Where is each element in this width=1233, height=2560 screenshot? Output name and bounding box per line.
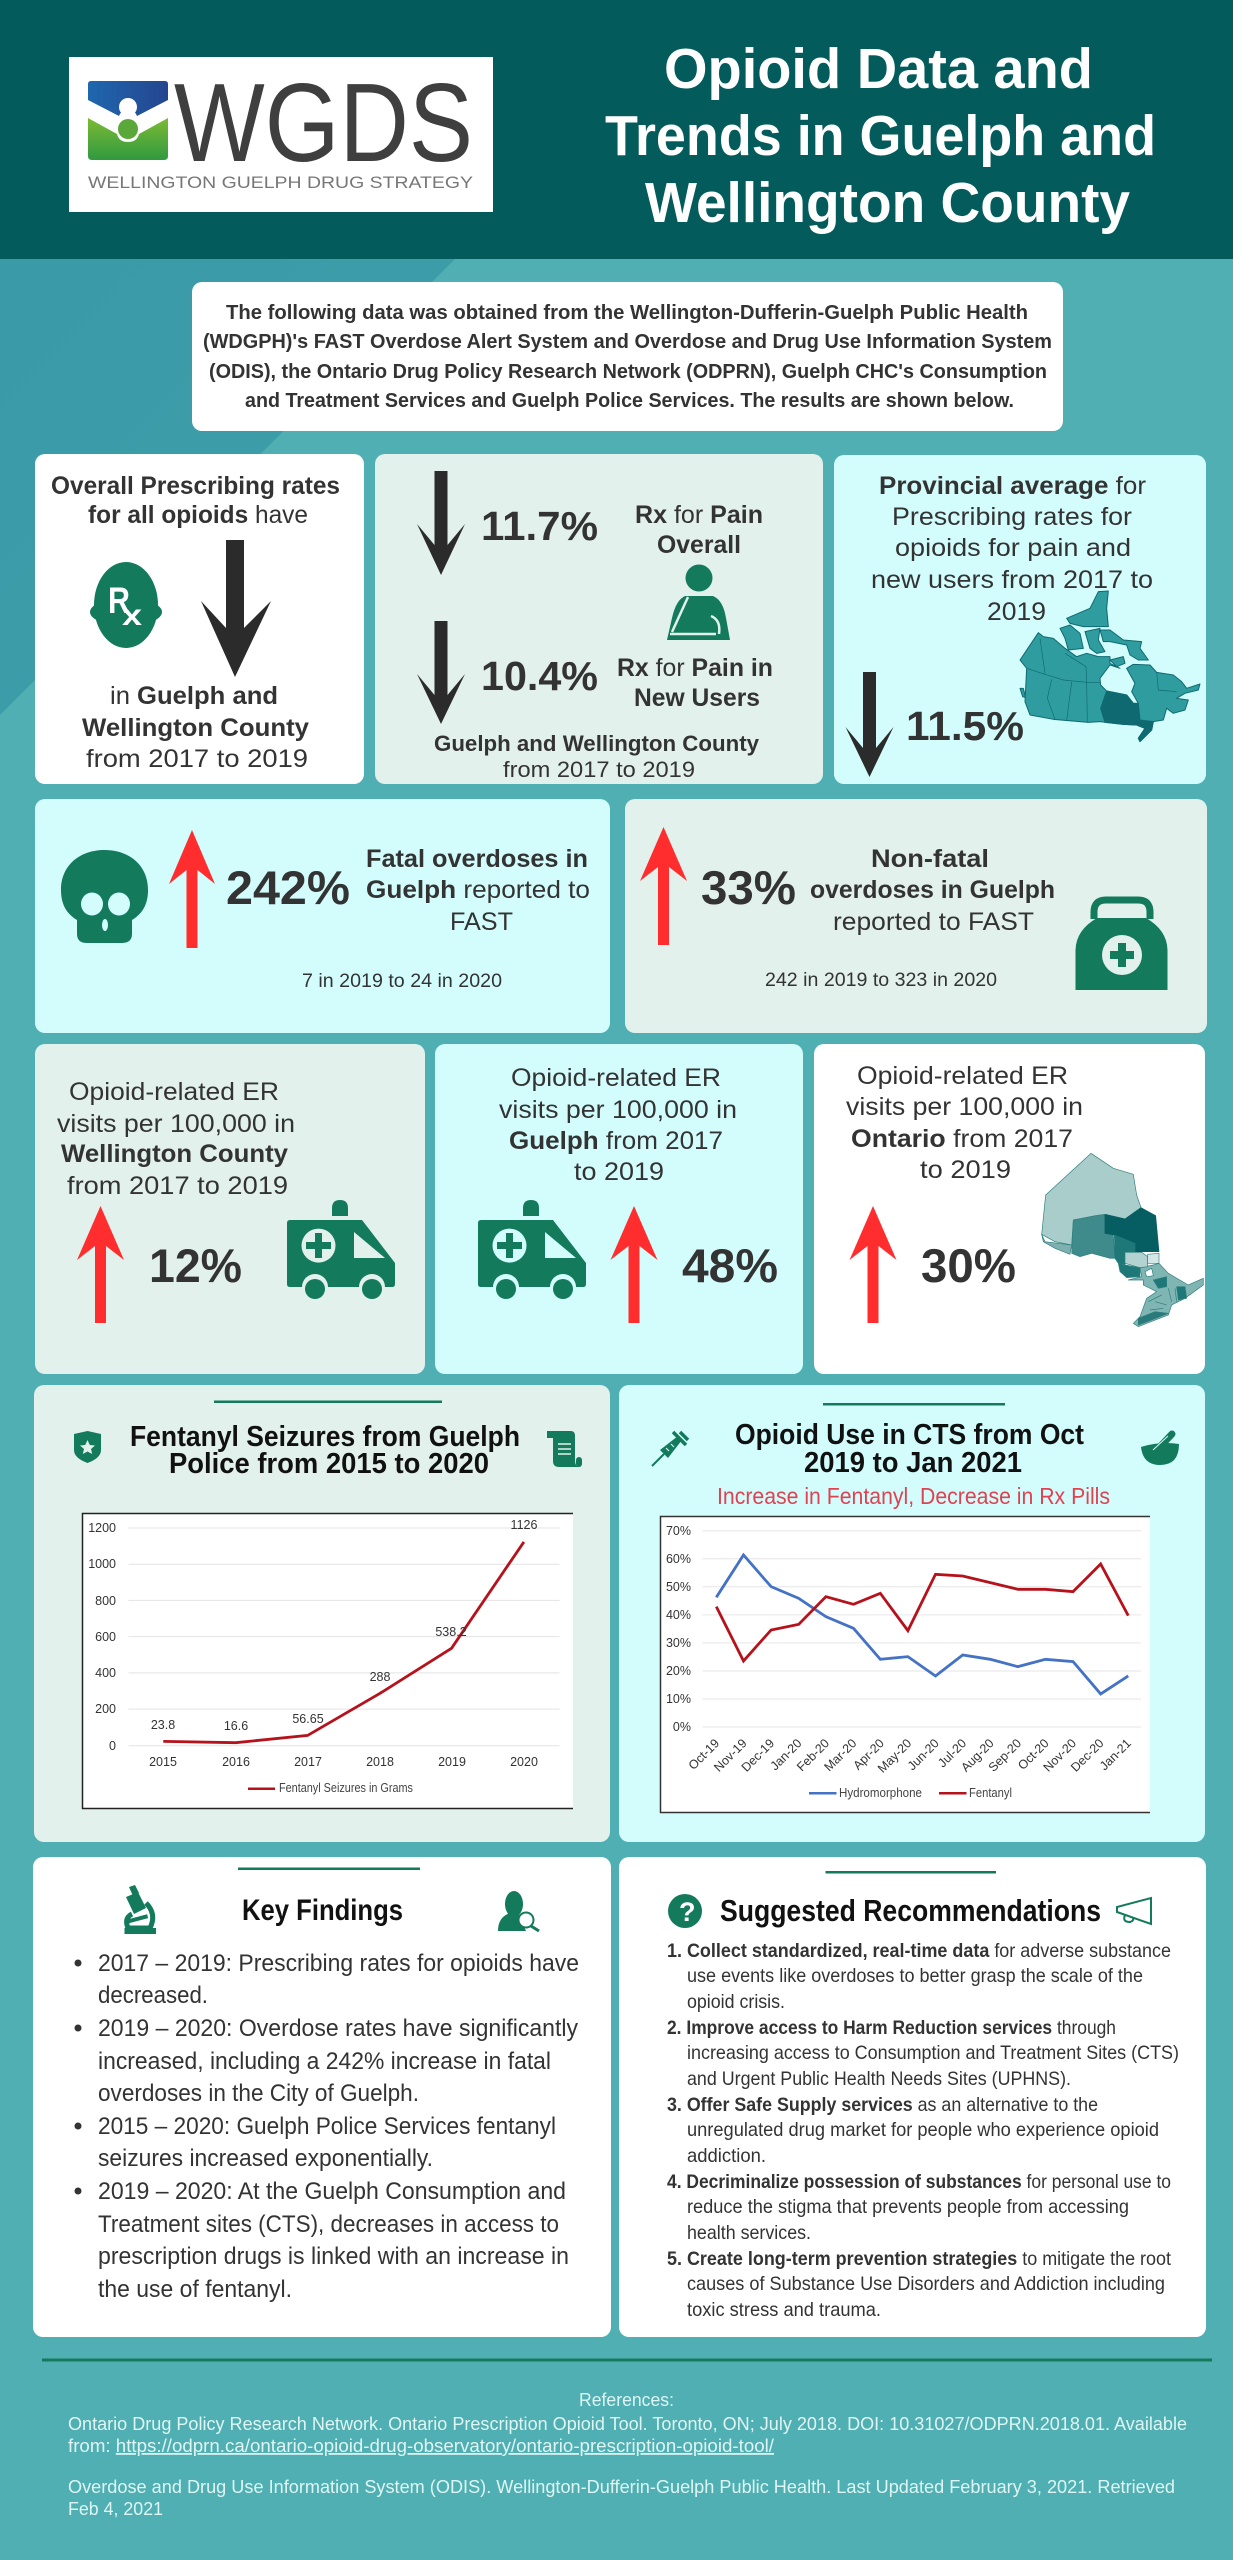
map: Ontario	[1042, 1153, 1203, 1327]
data labels	[151, 1518, 537, 1733]
numbered list: recommendations: use events like overdoses to better grasp the scale of the	[687, 1965, 1143, 1987]
text: ER visits Ontario: to 2019	[920, 1156, 1011, 1184]
x axis labels: Jan-21	[1097, 1736, 1134, 1773]
intro text box: (ODIS), the Ontario Drug Policy Research Network (ODPRN), Guelph CHC's Consumption	[209, 360, 1047, 383]
title: Trends in Guelph and	[605, 104, 1156, 168]
bullet list: key findings: 2019 – 2020: At the Guelph Consumption and	[98, 2178, 566, 2205]
x axis labels: 2020	[510, 1755, 538, 1769]
arrow: up red	[850, 1206, 896, 1323]
icon: scroll	[547, 1431, 582, 1467]
panel: ER visits Guelph	[435, 1044, 803, 1374]
x axis labels: Jan-20	[768, 1736, 805, 1773]
text: fatal overdoses in Guelph	[366, 845, 590, 936]
numbered list: recommendations: addiction.	[687, 2145, 766, 2167]
heading: opioid use in CTS	[735, 1419, 1084, 1479]
icon: person with sling	[667, 564, 730, 640]
text: provincial average: 2019	[987, 598, 1046, 626]
text: counts: 242 in 2019 to 323 in 2020	[765, 969, 997, 991]
series lines	[716, 1555, 1128, 1694]
icon: police shield	[74, 1431, 101, 1463]
title	[605, 37, 1156, 235]
bullet list: key findings	[74, 1950, 579, 2303]
references: from: https://odprn.ca/ontario-opioid-drug-observatory/ontario-prescription-opioid-tool/	[68, 2436, 774, 2456]
y axis labels: 0	[109, 1739, 116, 1753]
icon: syringe	[652, 1432, 688, 1466]
panel: Rx for pain	[375, 454, 823, 784]
x axis labels: 2017	[294, 1755, 322, 1769]
numbered list: recommendations: opioid crisis.	[687, 1991, 785, 2013]
y axis labels: 400	[95, 1666, 116, 1680]
intro text box: The following data was obtained from the Wellington-Dufferin-Guelph Public Health	[226, 301, 1028, 324]
text: provincial average: opioids for pain and	[895, 534, 1131, 562]
text: Rx for pain in new users: Rx for Pain in	[617, 654, 773, 682]
numbered list: recommendations	[667, 1940, 1179, 2321]
icon: Rx head	[90, 562, 162, 648]
map: Canada	[1020, 591, 1200, 742]
text: ER visits Wellington: Opioid-related ER	[69, 1078, 279, 1106]
header banner	[0, 0, 1233, 259]
text: provincial average: Provincial average for	[879, 472, 1146, 500]
data labels: 288	[370, 1670, 390, 1684]
data labels: 538.2	[435, 1625, 467, 1639]
y axis labels: 40%	[666, 1608, 691, 1622]
panel: key findings	[33, 1857, 611, 2337]
x axis labels: Mar-20	[822, 1736, 859, 1774]
numbered list: recommendations: reduce the stigma that prevents people from accessing	[687, 2196, 1129, 2218]
heading: opioid use in CTS: 2019 to Jan 2021	[804, 1447, 1022, 1479]
references: Ontario Drug Policy Research Network. Ontario Prescription Opioid Tool. Toronto, ON; July 2018. DOI: 10.31027/ODPRN.2018.01. Available	[68, 2414, 1187, 2434]
references: Overdose and Drug Use Information System (ODIS). Wellington-Dufferin-Guelph Public Health. Last Updated February 3, 2021. Retrieved	[68, 2477, 1175, 2497]
text: non-fatal overdoses: Non-fatal	[871, 845, 989, 873]
x axis labels: Dec-20	[1068, 1736, 1107, 1775]
text: counts: 7 in 2019 to 24 in 2020	[302, 970, 502, 992]
numbered list: recommendations: 3. Offer Safe Supply services as an alternative to the	[667, 2094, 1098, 2116]
text: fatal overdoses in Guelph: FAST	[450, 908, 513, 936]
text: Rx for pain overall: Overall	[657, 531, 741, 559]
y axis labels	[88, 1521, 116, 1753]
x axis labels: Nov-19	[711, 1736, 750, 1775]
text: location and years: from 2017 to 2019	[86, 745, 308, 773]
data labels: 16.6	[224, 1719, 248, 1733]
text: non-fatal overdoses: reported to FAST	[833, 908, 1034, 936]
y axis labels: 50%	[666, 1580, 691, 1594]
logo: WGDS: WGDS	[174, 61, 473, 185]
y axis labels: 10%	[666, 1692, 691, 1706]
icon: microscope	[124, 1885, 156, 1934]
y axis labels	[666, 1524, 691, 1734]
bullet list: key findings: decreased.	[98, 1982, 208, 2009]
title: Opioid Data and	[664, 37, 1093, 101]
text: ER visits Ontario: Ontario from 2017	[851, 1125, 1073, 1153]
intro text box	[192, 282, 1063, 431]
text: provincial average	[871, 472, 1153, 626]
numbered list: recommendations: causes of Substance Use Disorders and Addiction including	[687, 2273, 1165, 2295]
text: location and years: Wellington County	[82, 714, 309, 742]
text: location and years	[434, 731, 760, 782]
text: overall prescribing heading: Overall Prescribing rates	[51, 472, 340, 500]
stat: 242%: 242%	[226, 861, 350, 914]
x axis labels	[149, 1755, 538, 1769]
x axis labels: 2016	[222, 1755, 250, 1769]
text: Rx for pain overall	[635, 501, 763, 559]
panel: fatal overdoses	[35, 799, 610, 1033]
y axis labels: 800	[95, 1594, 116, 1608]
legend: Hydromorphone	[839, 1786, 922, 1800]
arrow: down 11.7	[417, 471, 465, 575]
panel: provincial average	[834, 455, 1206, 784]
text: fatal overdoses in Guelph: Fatal overdoses in	[366, 845, 588, 873]
text: location and years: from 2017 to 2019	[503, 757, 695, 782]
legend: Fentanyl	[969, 1786, 1012, 1800]
y axis labels: 0%	[673, 1720, 691, 1734]
bullet list: key findings: prescription drugs is linked with an increase in	[98, 2243, 569, 2270]
x axis labels: Apr-20	[850, 1736, 887, 1773]
x axis labels: May-20	[875, 1736, 914, 1776]
icon: megaphone	[1117, 1898, 1151, 1924]
text: ER visits Wellington: Wellington County	[61, 1140, 288, 1168]
text: overall prescribing heading: for all opioids have	[88, 501, 308, 529]
bullet list: key findings: 2019 – 2020: Overdose rates have significantly	[98, 2015, 579, 2042]
numbered list: recommendations: 5. Create long-term prevention strategies to mitigate the root	[667, 2248, 1172, 2270]
y axis labels: 200	[95, 1702, 116, 1716]
arrow: down 11.5	[846, 672, 894, 777]
x axis labels: Aug-20	[958, 1736, 997, 1775]
stat: 11.7%: 11.7%	[481, 503, 598, 549]
numbered list: recommendations: 1. Collect standardized, real-time data for adverse substance	[667, 1940, 1171, 1962]
stat: 33%: 33%	[701, 861, 796, 914]
x axis labels: Feb-20	[794, 1736, 832, 1774]
numbered list: recommendations: unregulated drug market for people who experience opioid	[687, 2119, 1159, 2141]
panel: overall prescribing rates	[35, 454, 364, 784]
y axis labels: 1200	[88, 1521, 116, 1535]
text: ER visits Ontario: Opioid-related ER	[857, 1062, 1068, 1090]
arrow: down 10.4	[417, 621, 465, 724]
heading: fentanyl seizures: Police from 2015 to 2020	[169, 1448, 489, 1480]
bullet list: key findings: overdoses in the City of Guelph.	[98, 2080, 419, 2107]
legend: Fentanyl Seizures in Grams	[279, 1781, 413, 1795]
icon: ambulance	[478, 1200, 586, 1300]
logo: WGDS	[69, 57, 493, 212]
legend	[809, 1786, 1012, 1800]
icon: ambulance	[287, 1200, 395, 1300]
y axis labels: 1000	[88, 1557, 116, 1571]
heading: fentanyl seizures	[130, 1421, 520, 1480]
text: ER visits Guelph: to 2019	[574, 1158, 664, 1186]
text: ER visits Guelph	[499, 1064, 737, 1186]
panel: non-fatal overdoses	[625, 799, 1207, 1033]
text: ER visits Wellington: from 2017 to 2019	[67, 1172, 288, 1200]
data labels: 1126	[511, 1518, 537, 1532]
arrow: up red	[169, 830, 215, 948]
intro text box: (WDGPH)'s FAST Overdose Alert System and Overdose and Drug Use Information System	[203, 330, 1052, 353]
bullet list: key findings: 2015 – 2020: Guelph Police Services fentanyl	[98, 2113, 556, 2140]
text: ER visits Guelph: Guelph from 2017	[509, 1127, 723, 1155]
stat: 48%: 48%	[682, 1239, 778, 1292]
text: ER visits Guelph: visits per 100,000 in	[499, 1096, 737, 1124]
text: non-fatal overdoses	[810, 845, 1055, 936]
logo: WGDS: WELLINGTON GUELPH DRUG STRATEGY	[88, 174, 473, 192]
bullet list: key findings: the use of fentanyl.	[98, 2276, 292, 2303]
y axis labels: 30%	[666, 1636, 691, 1650]
icon: skull	[61, 850, 148, 943]
text: ER visits Wellington	[57, 1078, 295, 1200]
text: Rx for pain overall: Rx for Pain	[635, 501, 763, 529]
arrow: up red	[77, 1206, 124, 1323]
text: location and years: Guelph and Wellington County	[434, 731, 760, 756]
panel: fentanyl seizures	[34, 1385, 610, 1842]
x axis labels: Oct-20	[1015, 1736, 1052, 1773]
y axis labels: 70%	[666, 1524, 691, 1538]
text: ER visits Guelph: Opioid-related ER	[511, 1064, 721, 1092]
bullet list: key findings: increased, including a 242% increase in fatal	[98, 2048, 551, 2075]
numbered list: recommendations: health services.	[687, 2222, 811, 2244]
text: non-fatal overdoses: overdoses in Guelph	[810, 876, 1055, 904]
x axis labels: Oct-19	[686, 1736, 722, 1773]
intro text box: and Treatment Services and Guelph Police Services. The results are shown below.	[245, 389, 1014, 412]
text: Rx for pain in new users	[617, 654, 773, 712]
numbered list: recommendations: toxic stress and trauma.	[687, 2299, 881, 2321]
references: References:	[579, 2390, 674, 2410]
numbered list: recommendations: 2. Improve access to Harm Reduction services through	[667, 2017, 1116, 2039]
text: location and years	[82, 682, 309, 773]
x axis labels: Sep-20	[986, 1736, 1024, 1775]
stat: 10.4%: 10.4%	[481, 653, 598, 699]
subheading: increase in fentanyl: Increase in Fentanyl, Decrease in Rx Pills	[717, 1483, 1110, 1509]
arrow: up red	[610, 1206, 658, 1323]
stat: 11.5%: 11.5%	[906, 703, 1024, 749]
numbered list: recommendations: 4. Decriminalize possession of substances for personal use to	[667, 2171, 1171, 2193]
icon: question mark	[668, 1894, 702, 1928]
numbered list: recommendations: increasing access to Consumption and Treatment Sites (CTS)	[687, 2042, 1179, 2064]
stat: 12%: 12%	[149, 1239, 242, 1292]
icon: Rx head: R	[108, 580, 130, 621]
arrow: up red	[640, 827, 687, 945]
icon: user search	[498, 1891, 539, 1931]
arrow: down	[201, 540, 271, 677]
text: ER visits Wellington: visits per 100,000 in	[57, 1110, 295, 1138]
heading: key findings: Key Findings	[242, 1894, 403, 1927]
panel: opioid use in CTS	[619, 1385, 1205, 1842]
heading: suggested recommendations: Suggested Recommendations	[720, 1893, 1101, 1928]
references	[68, 2390, 1187, 2519]
y axis labels: 600	[95, 1630, 116, 1644]
x axis labels: Dec-19	[739, 1736, 777, 1775]
heading: fentanyl seizures: Fentanyl Seizures from Guelph	[130, 1421, 520, 1453]
x axis labels: 2018	[366, 1755, 394, 1769]
references: Feb 4, 2021	[68, 2499, 163, 2519]
bullet list: key findings: seizures increased exponentially.	[98, 2145, 433, 2172]
numbered list: recommendations: and Urgent Public Health Needs Sites (UPHNS).	[687, 2068, 1071, 2090]
bullet list: key findings: 2017 – 2019: Prescribing rates for opioids have	[98, 1950, 579, 1977]
text: fatal overdoses in Guelph: Guelph reported to	[366, 876, 590, 904]
bullet list: key findings: Treatment sites (CTS), decreases in access to	[98, 2211, 559, 2238]
icon: question mark: ?	[679, 1897, 696, 1927]
icon: first aid kit	[1076, 900, 1168, 990]
y axis labels: 20%	[666, 1664, 691, 1678]
text: Rx for pain in new users: New Users	[634, 684, 760, 712]
text: provincial average: new users from 2017 to	[871, 566, 1153, 594]
title: Wellington County	[645, 171, 1130, 235]
icon: mortar and pestle	[1141, 1434, 1179, 1465]
y axis labels: 60%	[666, 1552, 691, 1566]
x axis labels: Jun-20	[905, 1736, 942, 1773]
x axis labels	[686, 1736, 1134, 1776]
x axis labels: 2015	[149, 1755, 177, 1769]
line chart: fentanyl seizures	[82, 1513, 573, 1809]
heading: opioid use in CTS: Opioid Use in CTS from Oct	[735, 1419, 1084, 1451]
panel: ER visits Wellington County	[35, 1044, 425, 1374]
stat: 30%: 30%	[921, 1239, 1016, 1292]
panel: ER visits Ontario	[814, 1044, 1205, 1374]
line chart: opioid use	[660, 1516, 1150, 1813]
text: overall prescribing heading	[51, 472, 340, 529]
x axis labels: Nov-20	[1041, 1736, 1079, 1775]
icon: Rx head: x	[122, 599, 142, 632]
text: provincial average: Prescribing rates for	[892, 503, 1132, 531]
text: ER visits Ontario	[846, 1062, 1083, 1184]
x axis labels: 2019	[438, 1755, 466, 1769]
text: location and years: in Guelph and	[110, 682, 278, 710]
text: ER visits Ontario: visits per 100,000 in	[846, 1093, 1083, 1121]
panel: suggested recommendations	[619, 1857, 1206, 2337]
data labels: 56.65	[292, 1712, 324, 1726]
data labels: 23.8	[151, 1718, 175, 1732]
x axis labels: Jul-20	[935, 1736, 969, 1770]
